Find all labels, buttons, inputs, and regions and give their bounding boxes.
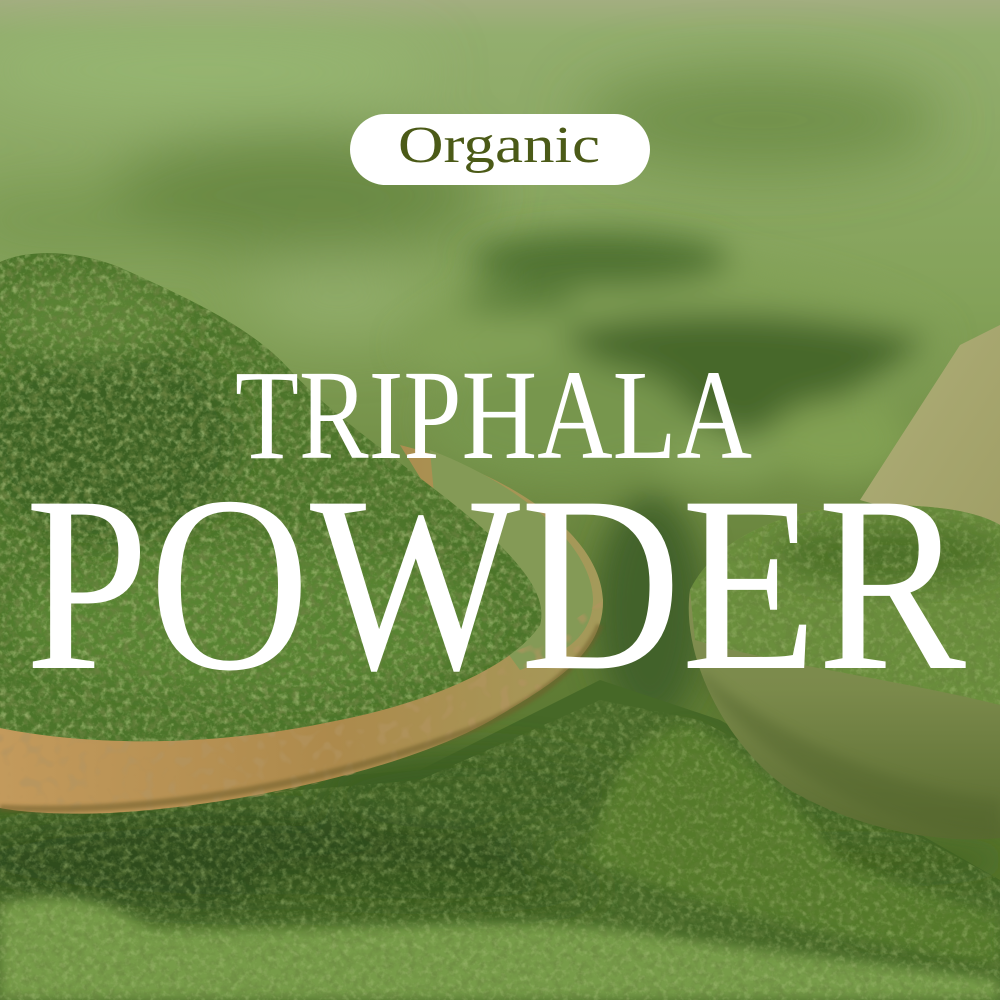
foreground powder xyxy=(0,680,1000,1000)
left wooden spoon xyxy=(0,445,610,820)
powder mound in left spoon xyxy=(0,240,560,760)
title: TRIPHALA: TRIPHALA xyxy=(235,344,752,486)
badge: Organic xyxy=(350,114,650,185)
badge: Organic: Organic xyxy=(398,117,600,174)
powder in right spoon xyxy=(680,500,1000,710)
right wooden spoon xyxy=(689,325,1000,839)
